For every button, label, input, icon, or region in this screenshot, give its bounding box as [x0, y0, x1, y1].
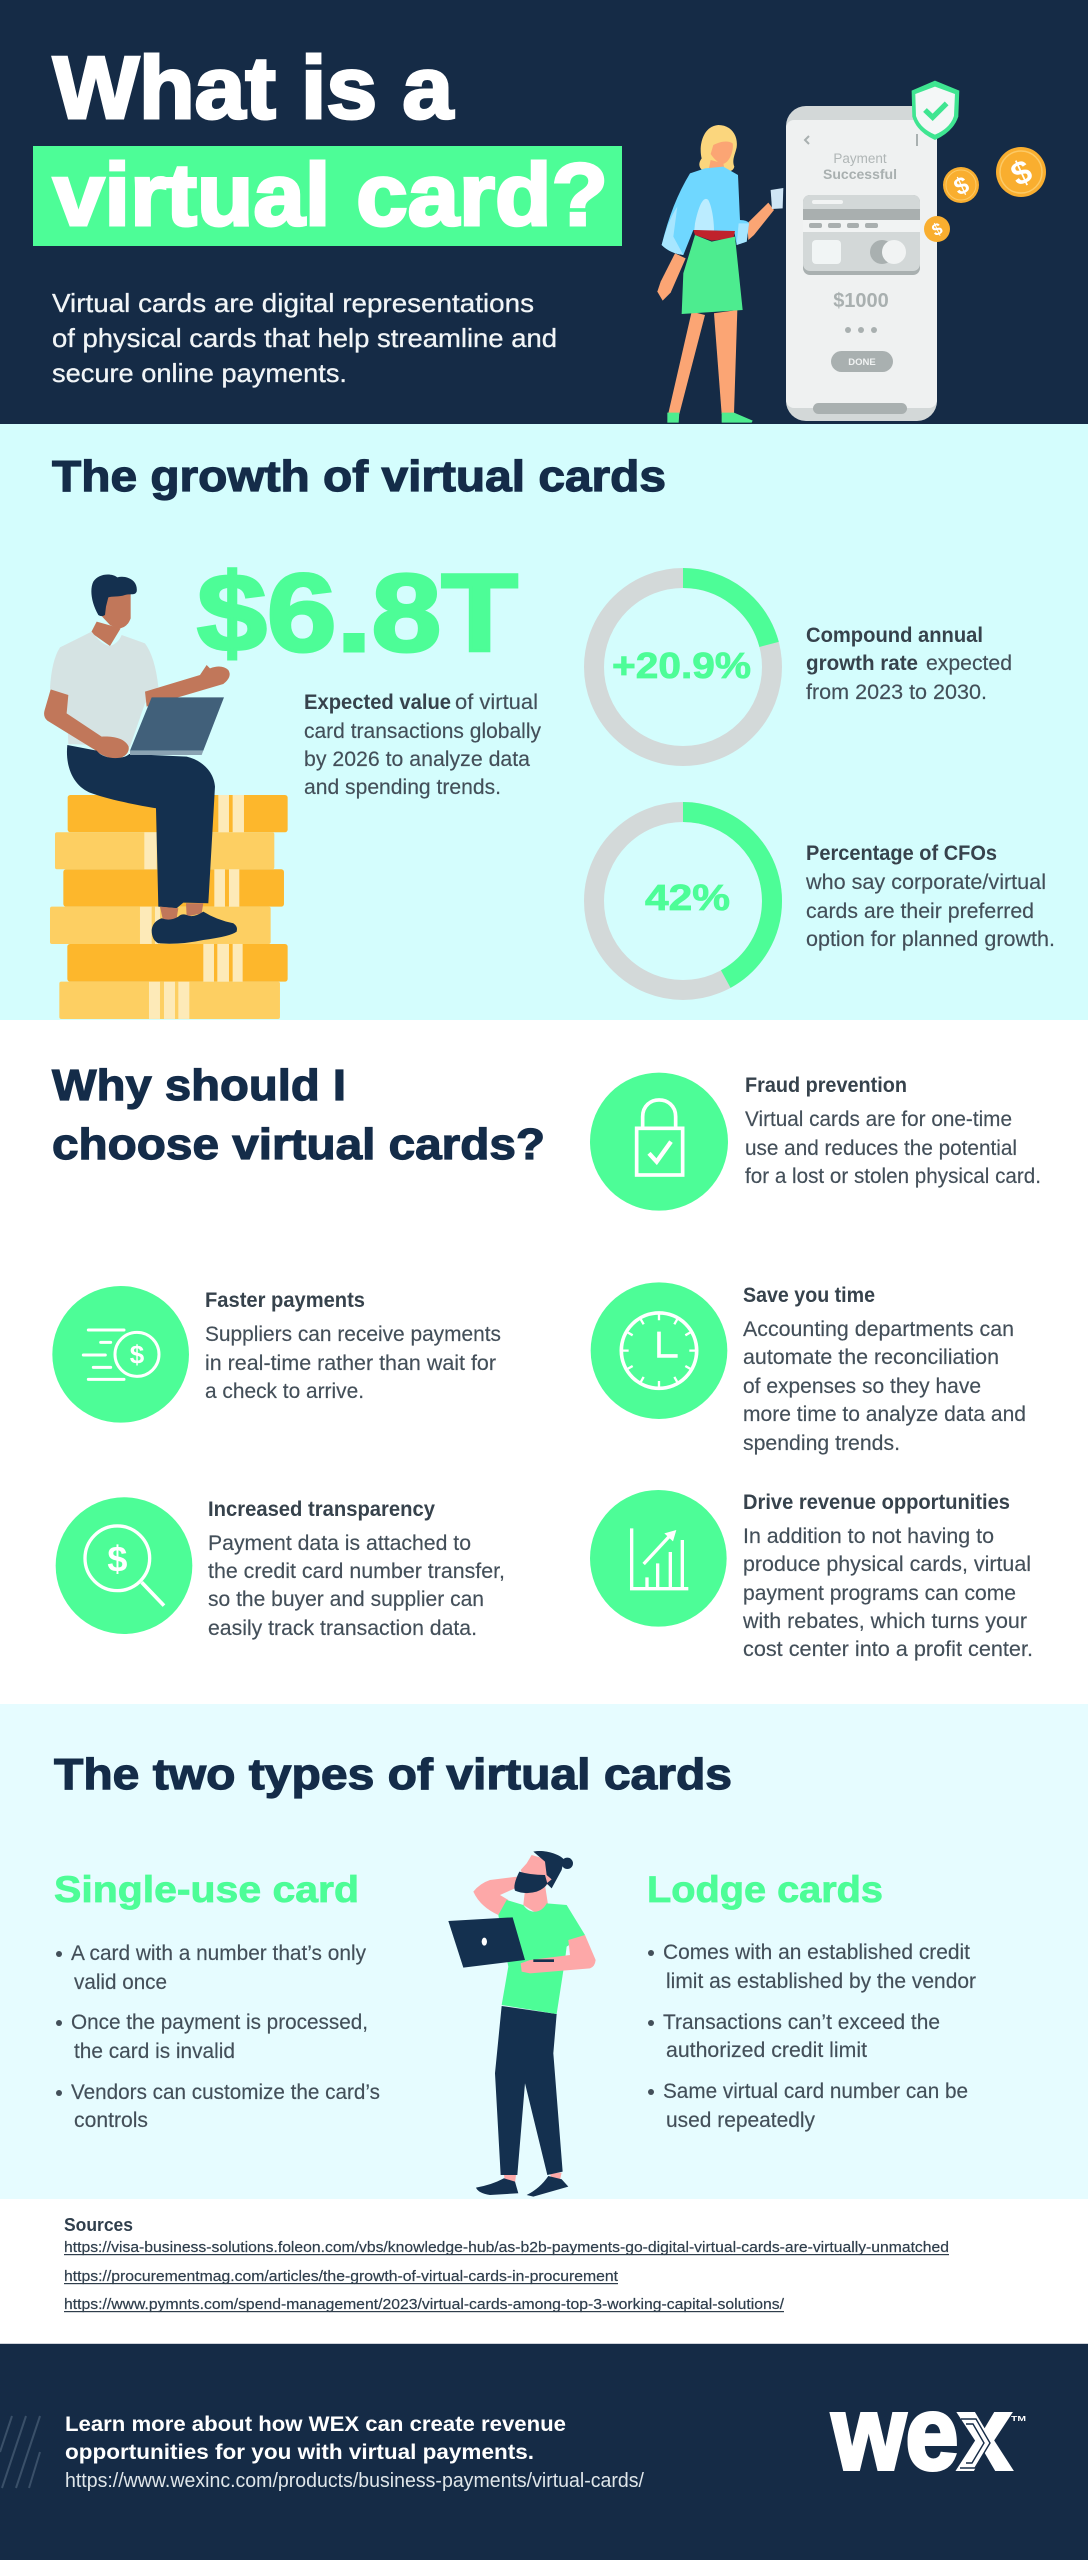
feature text: save you time: spending trends. — [743, 1432, 900, 1455]
title: What is a virtual card?: virtual card? — [53, 145, 608, 244]
column: lodge cards: Comes with an established credit — [663, 1941, 970, 1964]
source link 2: https://procurementmag.com/articles/the-growth-of-virtual-cards-in-procurement — [64, 2269, 618, 2285]
heading: The two types of virtual cards: The two types of virtual cards — [54, 1750, 732, 1799]
sources heading: Sources — [64, 2215, 133, 2235]
intro text: Virtual cards are digital representations — [52, 288, 534, 318]
panel: footer — [0, 2343, 1088, 2560]
column: single-use card: A card with a number that’s only — [71, 1942, 366, 1965]
call to action text — [65, 2413, 644, 2492]
column: single-use card: the card is invalid — [74, 2040, 235, 2063]
title: What is a virtual card? — [33, 38, 622, 246]
call to action text: Learn more about how WEX can create revenue — [65, 2413, 566, 2436]
feature text: fraud prevention: Virtual cards are for one-time — [745, 1108, 1012, 1131]
column: lodge cards: authorized credit limit — [666, 2039, 867, 2062]
stat text: compound annual growth rate: from 2023 to 2030. — [806, 681, 987, 704]
heading: Why should I choose virtual cards?: Why should I — [52, 1061, 346, 1110]
feature text: faster payments: a check to arrive. — [205, 1380, 364, 1403]
stat text: expected value: and spending trends. — [304, 776, 501, 799]
stat text: percentage of CFOs: who say corporate/virtual — [805, 871, 1046, 894]
feature text: drive revenue opportunities: payment programs can come — [743, 1582, 1016, 1605]
heading: The growth of virtual cards: The growth of virtual cards — [52, 452, 666, 501]
feature text: save you time: Accounting departments can — [743, 1318, 1014, 1341]
illustration: woman holding phone — [657, 125, 783, 423]
stat text: compound annual growth rate: expected — [926, 652, 1012, 675]
stat text: expected value: card transactions globally — [304, 720, 541, 743]
icon: security shield — [912, 81, 959, 140]
panel: why should I choose virtual cards — [0, 1020, 1088, 1704]
panel: header — [0, 0, 1088, 424]
icon: floating coins: $ — [1005, 152, 1037, 193]
icon: fast coin: $ — [130, 1340, 145, 1370]
source link 1: https://visa-business-solutions.foleon.com/vbs/knowledge-hub/as-b2b-payments-go-digital-virtual-cards-are-virtually-unmatched — [64, 2240, 949, 2256]
stat text: percentage of CFOs: Percentage of CFOs — [806, 842, 997, 865]
stat text: expected value: of virtual — [455, 691, 538, 714]
stat text: percentage of CFOs: cards are their preferred — [806, 900, 1034, 923]
icon: floating coins: $ — [950, 171, 974, 201]
illustration: man on coin stack with laptop — [44, 574, 288, 1019]
column: single-use card: Vendors can customize the card’s — [71, 2081, 380, 2104]
intro text: secure online payments. — [52, 358, 347, 388]
feature text: increased transparency: easily track transaction data. — [208, 1617, 477, 1640]
feature text: faster payments: Suppliers can receive payments — [205, 1323, 501, 1346]
heading: Why should I choose virtual cards?: choose virtual cards? — [52, 1120, 545, 1169]
feature text: save you time: of expenses so they have — [743, 1375, 981, 1398]
feature text: fraud prevention: Fraud prevention — [745, 1074, 907, 1097]
heading: Why should I choose virtual cards? — [52, 1061, 545, 1169]
icon: floating coins — [924, 147, 1046, 242]
feature text: increased transparency: Payment data is attached to — [208, 1532, 471, 1555]
stat text: compound annual growth rate: growth rate — [806, 652, 918, 675]
illustration: phone showing payment successful: DONE — [848, 357, 876, 368]
stat text: compound annual growth rate: Compound annual — [806, 624, 983, 647]
column: lodge cards: Transactions can’t exceed the — [663, 2011, 940, 2034]
feature text: drive revenue opportunities: In addition to not having to — [743, 1525, 994, 1548]
stat text: percentage of CFOs — [805, 842, 1055, 951]
icon: magnifying glass with dollar — [56, 1497, 192, 1634]
stat text: expected value — [304, 691, 541, 799]
feature text: increased transparency: so the buyer and supplier can — [208, 1588, 484, 1611]
panel: sources — [0, 2199, 1088, 2343]
feature text: save you time: more time to analyze data and — [743, 1403, 1026, 1426]
column: lodge cards: limit as established by the vendor — [666, 1970, 976, 1993]
feature text: drive revenue opportunities: cost center into a profit center. — [743, 1638, 1033, 1661]
icon: rising bar chart — [590, 1490, 727, 1627]
illustration: phone showing payment successful: Successful — [823, 166, 897, 182]
illustration: phone showing payment successful — [786, 106, 937, 421]
intro text — [52, 288, 557, 388]
column: lodge cards: used repeatedly — [666, 2109, 815, 2132]
call to action text: https://www.wexinc.com/products/business-payments/virtual-cards/ — [65, 2470, 644, 2492]
stat text: percentage of CFOs: option for planned growth. — [806, 928, 1055, 951]
donut chart: 42% — [594, 812, 772, 990]
column: single-use card — [54, 1869, 380, 2132]
big stat: $6.8T: $6.8T — [197, 552, 518, 675]
icon: floating coins: $ — [929, 219, 946, 240]
column: single-use card: Once the payment is processed, — [71, 2011, 368, 2034]
logo: WEX: wex — [831, 2376, 1011, 2492]
feature text: fraud prevention: for a lost or stolen physical card. — [745, 1165, 1041, 1188]
feature text: save you time: Save you time — [743, 1284, 875, 1307]
illustration: bearded man with laptop — [448, 1851, 596, 2197]
feature text: drive revenue opportunities: produce physical cards, virtual — [743, 1553, 1031, 1576]
column: lodge cards: Same virtual card number can be — [663, 2080, 968, 2103]
feature text: increased transparency: the credit card number transfer, — [208, 1560, 505, 1583]
stat text: compound annual growth rate — [806, 624, 1012, 704]
feature text: fraud prevention — [745, 1074, 1041, 1188]
title: What is a virtual card?: What is a — [53, 38, 454, 137]
icon: fast coin — [52, 1286, 189, 1423]
source link 3: https://www.pymnts.com/spend-management/2023/virtual-cards-among-top-3-working-capital-solutions/ — [64, 2297, 785, 2313]
column: lodge cards: Lodge cards — [647, 1869, 883, 1910]
call to action text: opportunities for you with virtual payments. — [65, 2441, 534, 2464]
illustration: phone showing payment successful: Payment — [833, 151, 887, 166]
illustration: phone showing payment successful: $1000 — [833, 290, 889, 312]
feature text: save you time — [743, 1284, 1026, 1455]
feature text: faster payments: in real-time rather than wait for — [205, 1352, 496, 1375]
column: single-use card: valid once — [74, 1971, 167, 1994]
icon: magnifying glass with dollar: $ — [107, 1539, 127, 1580]
feature text: increased transparency: Increased transparency — [208, 1498, 435, 1521]
feature text: faster payments — [205, 1289, 501, 1403]
feature text: save you time: automate the reconciliation — [743, 1346, 999, 1369]
panel: the two types of virtual cards — [0, 1704, 1088, 2199]
feature text: drive revenue opportunities: with rebates, which turns your — [742, 1610, 1027, 1633]
column: single-use card: Single-use card — [54, 1869, 359, 1910]
stat text: expected value: Expected value — [304, 691, 451, 714]
feature text: drive revenue opportunities — [742, 1491, 1033, 1661]
panel: the growth of virtual cards — [0, 424, 1088, 1020]
feature text: fraud prevention: use and reduces the potential — [745, 1137, 1017, 1160]
column: lodge cards — [647, 1869, 976, 2132]
donut chart: +20.9%: +20.9% — [612, 645, 751, 686]
donut chart: +20.9% — [594, 578, 772, 756]
stat text: expected value: by 2026 to analyze data — [304, 748, 530, 771]
intro text: of physical cards that help streamline and — [52, 323, 557, 353]
icon: clock — [591, 1282, 727, 1419]
feature text: faster payments: Faster payments — [205, 1289, 365, 1312]
feature text: drive revenue opportunities: Drive revenue opportunities — [743, 1491, 1010, 1514]
column: single-use card: controls — [74, 2109, 148, 2132]
icon: padlock with check — [590, 1073, 728, 1211]
donut chart: 42%: 42% — [645, 877, 730, 918]
logo: WEX: TM — [1011, 2414, 1026, 2423]
feature text: increased transparency — [208, 1498, 505, 1640]
